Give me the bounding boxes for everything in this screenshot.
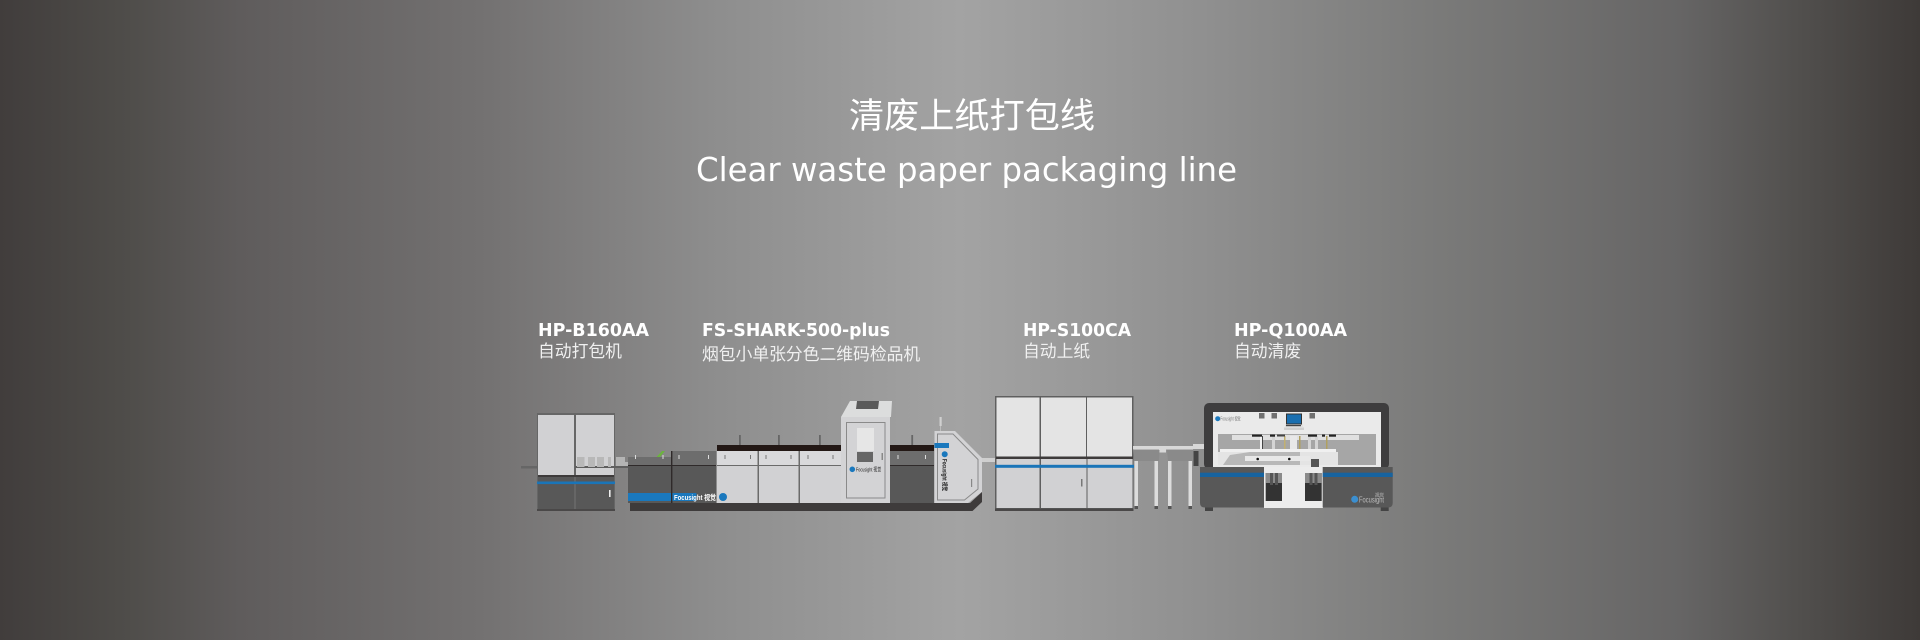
camera tower — [841, 401, 892, 503]
touch screen — [1284, 414, 1304, 430]
delivery end section: Focusight 视觉 — [940, 459, 948, 491]
base: Focusight — [1359, 496, 1385, 504]
machine: HP-Q100AA waste cleaner — [1200, 403, 1393, 511]
title: chinese: 清废上纸打包线 — [849, 97, 1095, 136]
base — [630, 492, 982, 511]
delivery end section — [934, 417, 1000, 503]
label: HP-Q100AA: 自动清废 — [1234, 342, 1301, 361]
label: HP-B160AA: 自动打包机 — [538, 342, 622, 361]
base: 视觉 — [1375, 492, 1384, 498]
label: HP-Q100AA: HP-Q100AA — [1234, 320, 1347, 341]
machine: FS-SHARK-500-plus inspection — [628, 401, 1000, 511]
title: english: Clear waste paper packaging line — [696, 150, 1237, 189]
dark feeder modules — [628, 451, 716, 503]
icon: logo small — [1215, 416, 1220, 421]
label: HP-S100CA: HP-S100CA — [1023, 320, 1131, 341]
label: FS-SHARK-500-plus: FS-SHARK-500-plus — [702, 320, 890, 341]
label: FS-SHARK-500-plus: 烟包小单张分色二维码检品机 — [702, 345, 920, 364]
frame — [1204, 403, 1389, 469]
label: FS-SHARK-500-plus — [702, 320, 920, 364]
camera tower: Focusight 视觉 — [856, 466, 881, 474]
dark module right — [890, 435, 934, 503]
title — [696, 97, 1237, 189]
conveyor — [1133, 444, 1204, 509]
dark feeder modules: Focusight 视觉 — [674, 492, 716, 502]
label: HP-B160AA: HP-B160AA — [538, 320, 649, 341]
label: HP-S100CA: 自动上纸 — [1023, 342, 1090, 361]
label: HP-S100CA — [1023, 320, 1131, 361]
machine: HP-B160AA packer — [521, 413, 629, 511]
fans — [1259, 413, 1315, 418]
icon: logo — [719, 493, 727, 501]
machine: HP-S100CA feeder — [995, 396, 1134, 511]
machine: HP-Q100AA waste cleaner: Focusight 视觉 — [1220, 416, 1240, 422]
base — [1200, 467, 1393, 511]
label: HP-B160AA — [538, 320, 649, 361]
uprights — [1252, 434, 1336, 449]
light modules — [717, 435, 841, 503]
label: HP-Q100AA — [1234, 320, 1347, 361]
